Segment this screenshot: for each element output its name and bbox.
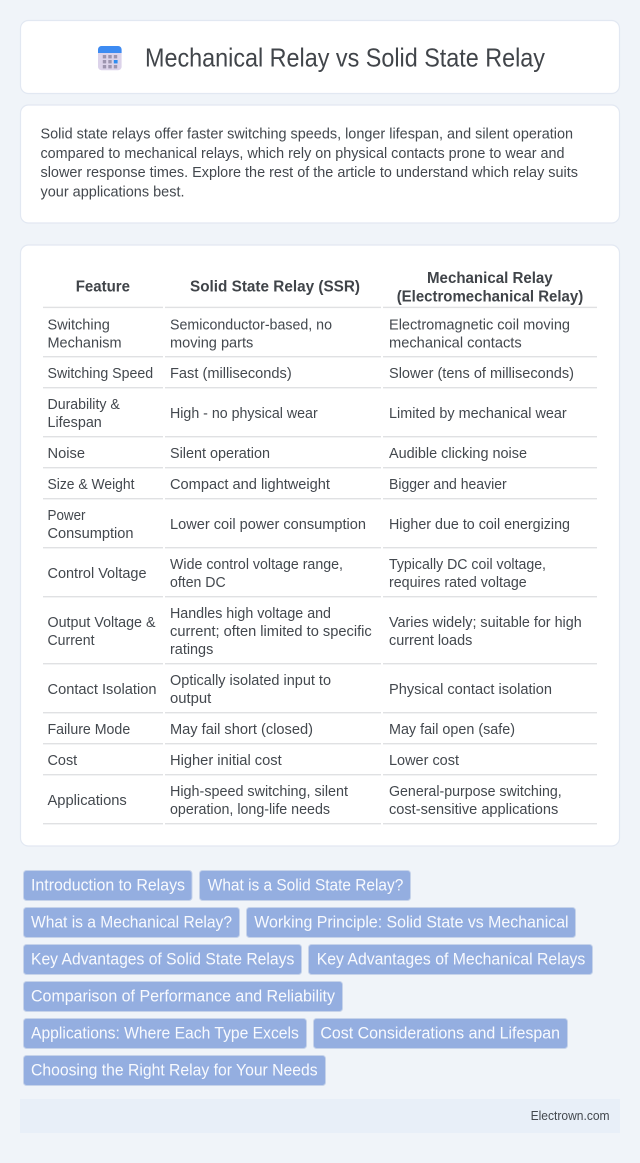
row: noise: Noise xyxy=(48,446,85,462)
row: switching mechanism: mechanical contacts xyxy=(389,335,522,351)
row: applications: operation, long-life needs xyxy=(170,802,330,818)
row: contact isolation: Contact Isolation xyxy=(48,682,156,698)
row: contact isolation xyxy=(48,673,552,707)
row: switching mechanism: Switching xyxy=(48,317,110,333)
row: output voltage and current: Varies widely; suitable for high xyxy=(389,615,582,631)
row: output voltage and current: current loads xyxy=(389,633,472,649)
tag: mechanical relay xyxy=(24,908,240,938)
title: Mechanical Relay vs Solid State Relay xyxy=(145,45,545,73)
row: size and weight: Bigger and heavier xyxy=(389,477,507,493)
panel: intro text xyxy=(20,105,620,223)
row: size and weight xyxy=(48,477,507,493)
row: control voltage: Typically DC coil voltage, xyxy=(389,557,546,573)
icon: calendar grid xyxy=(98,46,122,70)
tag: mechanical relay: What is a Mechanical Relay? xyxy=(31,914,232,932)
row: switching speed: Slower (tens of milliseconds) xyxy=(389,366,574,382)
tag: applications: Applications: Where Each Type Excels xyxy=(31,1025,299,1043)
tag: advantages mechanical: Key Advantages of Mechanical Relays xyxy=(317,951,585,969)
row: failure mode: May fail open (safe) xyxy=(389,722,515,738)
row: noise xyxy=(48,446,527,462)
table header row: Solid State Relay (SSR) xyxy=(190,279,360,296)
row: switching mechanism: Semiconductor-based, no xyxy=(170,317,332,333)
tag: introduction: Introduction to Relays xyxy=(31,877,185,895)
row: switching mechanism: Mechanism xyxy=(48,335,122,351)
tag: applications xyxy=(24,1018,306,1048)
tag: advantages mechanical xyxy=(308,944,592,974)
table header row: Feature xyxy=(76,279,130,296)
row: switching speed: Switching Speed xyxy=(48,366,153,382)
row: cost: Lower cost xyxy=(389,753,459,769)
row: control voltage: requires rated voltage xyxy=(389,575,527,591)
row: failure mode xyxy=(48,722,515,738)
panel: intro text: your applications best. xyxy=(40,183,184,200)
row: applications: General-purpose switching, xyxy=(389,784,562,800)
topic tags xyxy=(24,870,592,1086)
row: failure mode: Failure Mode xyxy=(48,722,130,738)
row: control voltage xyxy=(48,557,546,591)
row: power consumption: Power xyxy=(48,508,86,524)
row: output voltage and current: Handles high voltage and xyxy=(170,606,331,622)
row: control voltage: Control Voltage xyxy=(48,566,146,582)
table header row: Mechanical Relay xyxy=(427,270,553,287)
tag: advantages solid state xyxy=(24,944,302,974)
tag: choosing relay: Choosing the Right Relay for Your Needs xyxy=(31,1062,318,1080)
row: switching mechanism: Electromagnetic coil moving xyxy=(389,317,570,333)
row: contact isolation: Physical contact isolation xyxy=(389,682,552,698)
footer: Electrown.com xyxy=(531,1108,610,1123)
row: contact isolation: output xyxy=(170,691,211,707)
row: durability: High - no physical wear xyxy=(170,406,318,422)
row: power consumption xyxy=(48,508,570,542)
tag: solid state relay xyxy=(200,870,410,900)
tag: introduction xyxy=(24,870,192,900)
table header row xyxy=(76,270,583,305)
row: applications: cost-sensitive applications xyxy=(389,802,558,818)
panel: intro text: slower response times. Explore the rest of the article to understand which relay suits xyxy=(40,164,578,181)
row: switching mechanism xyxy=(48,317,570,351)
panel: intro text: compared to mechanical relays, which rely on physical contacts prone to wear and xyxy=(40,145,564,162)
row: durability: Limited by mechanical wear xyxy=(389,406,567,422)
tag: working principle: Working Principle: Solid State vs Mechanical xyxy=(254,914,569,932)
panel: intro text: Solid state relays offer faster switching speeds, longer lifespan, and silent operation xyxy=(40,126,573,143)
row: switching speed xyxy=(48,366,574,382)
footer xyxy=(20,1099,620,1133)
row: noise: Audible clicking noise xyxy=(389,446,527,462)
row: size and weight: Size & Weight xyxy=(48,477,134,493)
tag: performance comparison xyxy=(24,982,342,1012)
tag: solid state relay: What is a Solid State Relay? xyxy=(208,877,403,895)
row: durability xyxy=(48,397,567,431)
row: size and weight: Compact and lightweight xyxy=(170,477,330,493)
row: power consumption: Higher due to coil energizing xyxy=(389,517,570,533)
tag: working principle xyxy=(246,908,576,938)
row: switching mechanism: moving parts xyxy=(170,335,253,351)
row: control voltage: often DC xyxy=(170,575,226,591)
row: power consumption: Lower coil power consumption xyxy=(170,517,366,533)
row: noise: Silent operation xyxy=(170,446,270,462)
row: failure mode: May fail short (closed) xyxy=(170,722,313,738)
row: contact isolation: Optically isolated input to xyxy=(170,673,331,689)
tag: cost and lifespan xyxy=(314,1018,568,1048)
row: applications: High-speed switching, silent xyxy=(170,784,348,800)
tag: advantages solid state: Key Advantages of Solid State Relays xyxy=(31,951,294,969)
table header row: (Electromechanical Relay) xyxy=(397,288,583,305)
row: applications xyxy=(48,784,562,818)
tag: choosing relay xyxy=(24,1056,326,1086)
row: switching speed: Fast (milliseconds) xyxy=(170,366,292,382)
tag: cost and lifespan: Cost Considerations and Lifespan xyxy=(320,1025,560,1043)
row: durability: Durability & xyxy=(48,397,120,413)
row: output voltage and current: Output Voltage & xyxy=(48,615,156,631)
row: output voltage and current: ratings xyxy=(170,642,213,658)
row: applications: Applications xyxy=(48,793,127,809)
row: output voltage and current: Current xyxy=(48,633,94,649)
panel: comparison table xyxy=(20,245,620,846)
row: output voltage and current xyxy=(48,606,582,658)
tag: performance comparison: Comparison of Performance and Reliability xyxy=(31,988,336,1006)
row: durability: Lifespan xyxy=(48,415,102,431)
row: control voltage: Wide control voltage range, xyxy=(170,557,343,573)
row: power consumption: Consumption xyxy=(48,526,134,542)
header panel xyxy=(20,20,620,94)
row: output voltage and current: current; often limited to specific xyxy=(170,624,372,640)
row: cost: Cost xyxy=(48,753,77,769)
row: cost xyxy=(48,753,459,769)
row: cost: Higher initial cost xyxy=(170,753,282,769)
